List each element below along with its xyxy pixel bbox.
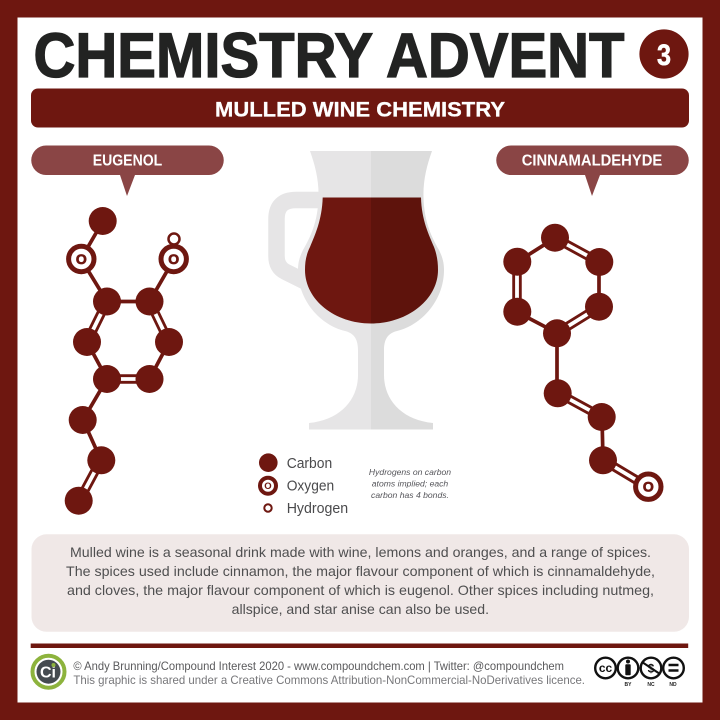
title: CHEMISTRY ADVENT	[34, 21, 624, 91]
logo: compound interest: Ci	[40, 664, 56, 682]
creative commons icons: $	[648, 662, 655, 676]
description panel	[32, 534, 689, 632]
legend: Hydrogen	[287, 500, 348, 517]
creative commons icons: ND	[669, 682, 677, 688]
label: cinnamaldehyde: CINNAMALDEHYDE	[522, 153, 663, 170]
legend: Carbon	[287, 455, 332, 472]
number badge	[639, 29, 689, 79]
description panel: The spices used include cinnamon, the major flavour component of which is cinnamaldehyde,	[66, 563, 655, 579]
label: eugenol	[31, 146, 224, 196]
logo: compound interest	[32, 656, 64, 688]
molecule: eugenol	[65, 207, 186, 515]
description panel: Mulled wine is a seasonal drink made with wine, lemons and oranges, and a range of spices.	[70, 544, 651, 560]
molecule: eugenol: O	[76, 251, 87, 267]
label: eugenol: EUGENOL	[93, 153, 162, 170]
creative commons icons	[595, 658, 684, 688]
label: cinnamaldehyde	[496, 146, 689, 196]
credit text	[73, 659, 585, 687]
hydrogen note	[369, 467, 451, 500]
legend: O	[264, 481, 272, 492]
legend	[259, 453, 348, 517]
credit text: This graphic is shared under a Creative Commons Attribution-NonCommercial-NoDerivatives licence.	[73, 673, 585, 687]
hydrogen note: carbon has 4 bonds.	[371, 490, 449, 500]
credit text: © Andy Brunning/Compound Interest 2020 - www.compoundchem.com | Twitter: @compoundchem	[73, 659, 564, 673]
description panel: and cloves, the major flavour component of which is eugenol. Other spices including nutmeg,	[67, 582, 654, 598]
molecule: cinnamaldehyde: O	[643, 479, 654, 495]
hydrogen note: Hydrogens on carbon	[369, 467, 451, 477]
mulled wine glass	[276, 151, 444, 430]
creative commons icons: BY	[625, 682, 632, 688]
molecule: eugenol: O	[168, 251, 179, 267]
molecule: cinnamaldehyde	[503, 224, 661, 499]
description panel: allspice, and star anise can also be used.	[232, 601, 489, 617]
number badge: 3	[657, 39, 671, 72]
subtitle bar	[31, 88, 689, 128]
hydrogen note: atoms implied; each	[372, 478, 448, 488]
creative commons icons: cc	[599, 661, 612, 675]
subtitle bar: MULLED WINE CHEMISTRY	[215, 99, 505, 122]
creative commons icons: NC	[647, 682, 655, 688]
legend: Oxygen	[287, 478, 334, 494]
